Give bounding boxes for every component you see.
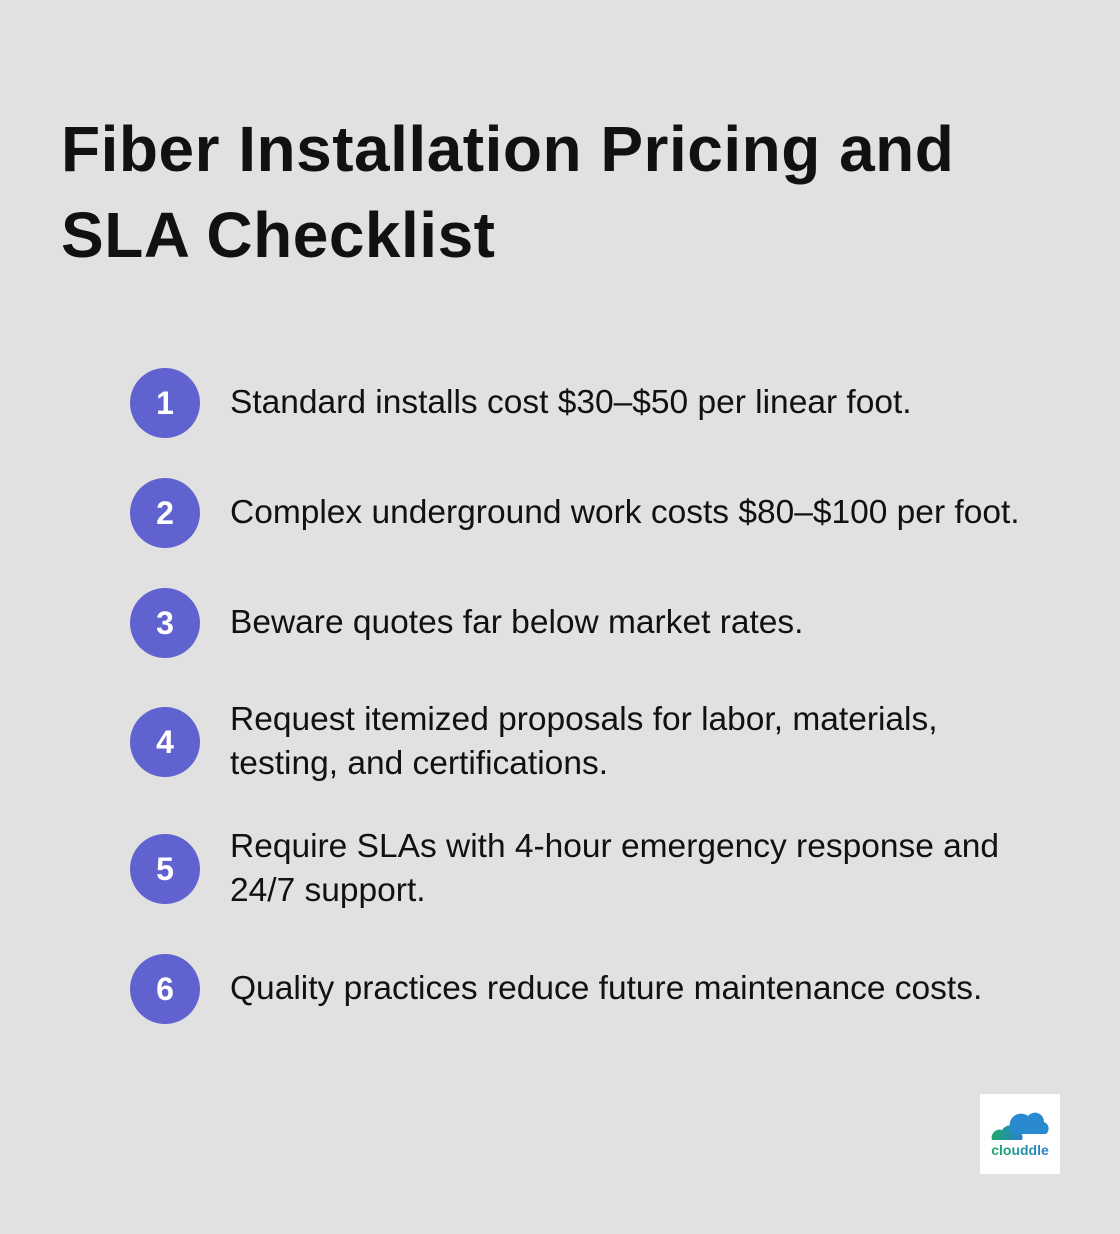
- item 6: Quality practices reduce future maintenance costs.: [230, 970, 982, 1007]
- logo: clouddle: [991, 1142, 1049, 1158]
- item 2: [130, 478, 1020, 548]
- title: SLA Checklist: [61, 199, 495, 271]
- title: [61, 113, 954, 271]
- item 3: 3: [156, 605, 174, 641]
- item 1: 1: [156, 385, 174, 421]
- item 3: [130, 588, 804, 658]
- item 4: 4: [156, 724, 174, 760]
- item 6: 6: [156, 971, 174, 1007]
- item 5: 5: [156, 851, 174, 887]
- item 1: Standard installs cost $30–$50 per linear foot.: [230, 384, 912, 421]
- title: Fiber Installation Pricing and: [61, 113, 954, 185]
- item 1: [130, 368, 912, 438]
- logo: [980, 1094, 1060, 1174]
- item 6: [130, 954, 982, 1024]
- item 3: Beware quotes far below market rates.: [230, 604, 804, 641]
- item 4: Request itemized proposals for labor, materials, testing, and certifications.: [230, 701, 938, 782]
- item 5: Require SLAs with 4-hour emergency response and 24/7 support.: [230, 828, 999, 909]
- item 2: 2: [156, 495, 174, 531]
- item 2: Complex underground work costs $80–$100 per foot.: [230, 494, 1020, 531]
